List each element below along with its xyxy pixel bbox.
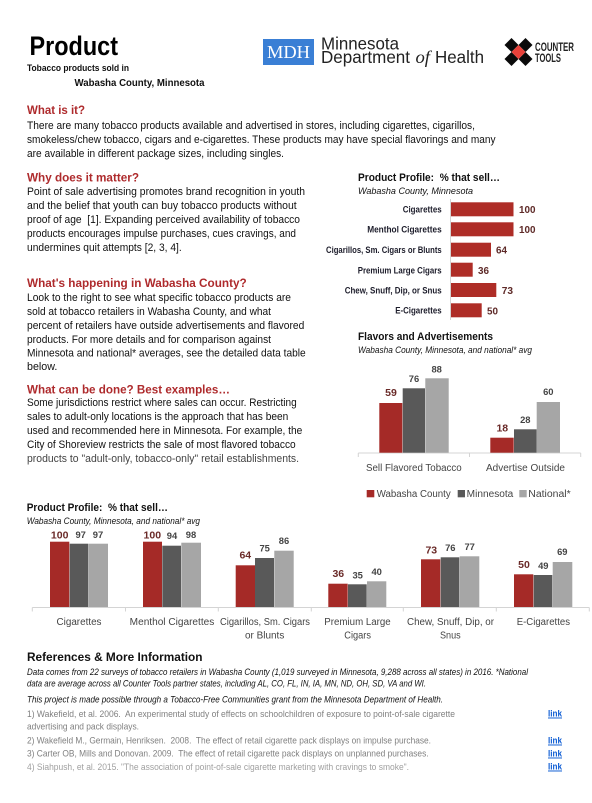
- body text: products to "adult-only, tobacco-only" retail establishments.: [27, 453, 299, 465]
- bar: Menthol Cigarettes: Menthol Cigarettes: [367, 224, 442, 236]
- group: Sell Flavored Tobacco: 76: [409, 373, 419, 384]
- legend: Minnesota: [467, 489, 514, 500]
- body text: Minnesota and national* averages, see the detailed data table: [27, 348, 306, 360]
- group: Advertise Outside: [486, 386, 565, 474]
- group: Premium Large Cigars: Premium Large: [324, 617, 391, 628]
- reference 4: link: [548, 762, 563, 772]
- body text: products. For more details and for comparison against: [27, 334, 271, 346]
- group: Premium Large Cigars: Cigars: [344, 630, 371, 642]
- reference 2: 2) Wakefield M., Germain, Henriksen. 2008. The effect of retail cigarette pack displays on impulse purchase.: [27, 734, 431, 746]
- logo: Counter Tools: COUNTER: [535, 42, 574, 54]
- bar: Cigarettes: [403, 202, 536, 216]
- legend: [367, 489, 571, 500]
- title: Product: [30, 31, 118, 61]
- group: Sell Flavored Tobacco: 59: [385, 387, 397, 399]
- chart subtitle: Wabasha County, Minnesota, and national* avg: [358, 344, 533, 355]
- group: Cigarillos: Cigarillos, Sm. Cigars: [220, 617, 310, 628]
- group: Cigarettes: [50, 529, 108, 628]
- logo: Counter Tools: [504, 38, 574, 66]
- reference 1: advertising and pack displays.: [27, 720, 139, 732]
- body text: Point of sale advertising promotes brand recognition in youth: [27, 186, 305, 198]
- bar: Chew, Snuff: 73: [502, 285, 513, 297]
- group: Cigarillos: or Blunts: [245, 630, 284, 642]
- chart heading: Product Profile: % that sell…: [358, 172, 500, 184]
- group: Cigarettes: 97: [75, 529, 86, 540]
- group: E-Cigarettes: E-Cigarettes: [517, 617, 570, 628]
- group: Cigarettes: 100: [51, 530, 69, 542]
- logo: Minnesota Department of Health: Health: [435, 47, 484, 67]
- group: Chew, Snuff: 76: [445, 542, 456, 553]
- logo: Minnesota Department of Health: Minnesota: [321, 34, 399, 54]
- group: Chew, Snuff: 77: [464, 541, 475, 552]
- group: Menthol Cigarettes: 100: [144, 530, 161, 542]
- reference 1: link: [548, 708, 563, 720]
- heading: What is it?: [27, 103, 85, 117]
- group: Cigarillos: [220, 535, 310, 642]
- body text: Look to the right to see what specific tobacco products are: [27, 292, 291, 304]
- header: [27, 31, 574, 89]
- body text: [27, 186, 305, 254]
- group: E-Cigarettes: 50: [518, 559, 530, 571]
- bar: Cigarillos: Cigarillos, Sm. Cigars or Blunts: [326, 245, 442, 256]
- group: E-Cigarettes: [514, 546, 572, 628]
- logo: Minnesota Department of Health: [263, 34, 484, 67]
- body text: below.: [27, 361, 57, 373]
- reference 3: link: [548, 748, 563, 760]
- group: Menthol Cigarettes: 98: [186, 529, 196, 540]
- chart: product profile comparison columns: [27, 502, 589, 642]
- bar: Cigarillos: [326, 243, 507, 257]
- group: Premium Large Cigars: 36: [332, 568, 344, 580]
- body text: sales to adult-only locations is the approach that has been: [27, 411, 288, 423]
- body text: Some jurisdictions restrict where sales can occur. Restricting: [27, 397, 297, 409]
- body text: [27, 120, 496, 160]
- group: Sell Flavored Tobacco: Sell Flavored Tobacco: [366, 463, 462, 474]
- reference 4: 4) Siahpush, et al. 2015. "The association of point-of-sale cigarette marketing with cravings to smoke".: [27, 761, 409, 772]
- group: Cigarettes: Cigarettes: [56, 617, 102, 628]
- section: what is it: [27, 103, 496, 160]
- group: E-Cigarettes: 69: [557, 546, 568, 557]
- group: Cigarillos: 86: [279, 535, 289, 546]
- bar: E-Cigarettes: 50: [487, 306, 498, 318]
- logo: Minnesota Department of Health: MDH: [267, 42, 310, 62]
- bar: Cigarettes: 100: [519, 204, 536, 216]
- heading: References & More Information: [27, 650, 202, 664]
- body text: products encourages impulse purchases, cues cravings, and: [27, 228, 296, 240]
- group: Advertise Outside: 28: [520, 414, 531, 425]
- body text: proof of age [1]. Expanding perceived availability of tobacco: [27, 214, 300, 226]
- bar: Cigarettes: Cigarettes: [403, 204, 442, 216]
- heading: What's happening in Wabasha County?: [27, 276, 247, 290]
- data note: data are average across all Counter Tools partner states, including AL, CO, FL, IN, IA, MN, ND, OH, SD, VA and WI.: [27, 678, 426, 688]
- chart heading: Flavors and Advertisements: [358, 331, 493, 343]
- group: Sell Flavored Tobacco: 88: [431, 364, 442, 374]
- bar: Premium Large Cigars: Premium Large Cigars: [358, 266, 442, 276]
- group: Advertise Outside: 60: [543, 386, 554, 397]
- body text: undermines quit attempts [2, 3, 4].: [27, 242, 182, 254]
- group: Cigarillos: 64: [239, 550, 251, 562]
- reference 3: 3) Carter OB, Mills and Donovan. 2009. The effect of retail cigarette pack displays on unplanned purchases.: [27, 748, 429, 758]
- group: Advertise Outside: 18: [496, 422, 508, 434]
- legend: Wabasha County: [377, 489, 451, 500]
- group: Sell Flavored Tobacco: [366, 364, 462, 474]
- bar: Chew, Snuff: Chew, Snuff, Dip, or Snus: [345, 286, 442, 296]
- reference 1: 1) Wakefield, et al. 2006. An experimental study of effects on schoolchildren of exposure to point-of-sale cigarette: [27, 708, 455, 719]
- bar: E-Cigarettes: E-Cigarettes: [395, 306, 442, 316]
- group: Chew, Snuff: 73: [425, 544, 437, 556]
- group: Premium Large Cigars: 35: [352, 570, 363, 580]
- group: Menthol Cigarettes: Menthol Cigarettes: [130, 617, 214, 628]
- body text: are available in different package sizes, including singles.: [27, 148, 284, 160]
- group: Menthol Cigarettes: [130, 529, 214, 628]
- body text: City of Shoreview restricts the sale of most flavored tobacco: [27, 439, 296, 451]
- body text: [27, 292, 306, 373]
- logo: Minnesota Department of Health: of: [416, 47, 432, 67]
- group: Cigarettes: 97: [93, 529, 103, 540]
- heading: Why does it matter?: [27, 170, 139, 184]
- logo: Minnesota Department of Health: Department: [321, 47, 410, 67]
- subtitle line 1: Tobacco products sold in: [27, 63, 129, 73]
- bar: Cigarillos: 64: [496, 244, 507, 256]
- group: Premium Large Cigars: 40: [371, 566, 382, 577]
- reference 1: [27, 708, 563, 732]
- section: why does it matter: [27, 170, 305, 254]
- data note: [27, 666, 529, 688]
- body text: and the belief that youth can buy tobacco products without: [27, 200, 297, 212]
- group: Premium Large Cigars: [324, 566, 391, 642]
- chart heading: Product Profile: % that sell…: [27, 502, 168, 514]
- heading: What can be done? Best examples…: [27, 382, 230, 396]
- group: E-Cigarettes: 49: [538, 560, 549, 571]
- bar: Menthol Cigarettes: [367, 222, 536, 236]
- bar: Premium Large Cigars: 36: [478, 265, 489, 277]
- chart subtitle: Wabasha County, Minnesota: [358, 185, 473, 196]
- bar: E-Cigarettes: [395, 303, 498, 318]
- bar: Menthol Cigarettes: 100: [519, 224, 536, 236]
- bar: Chew, Snuff: [345, 283, 513, 297]
- group: Advertise Outside: Advertise Outside: [486, 463, 565, 474]
- legend: National*: [528, 489, 571, 500]
- chart: flavors and advertisements: [358, 331, 581, 500]
- section: references: [27, 650, 563, 772]
- body text: used and recommended here in Minnesota. For example, the: [27, 425, 302, 437]
- group: Cigarillos: 75: [259, 542, 270, 554]
- reference 2: link: [548, 736, 563, 746]
- subtitle county: Wabasha County, Minnesota: [74, 78, 205, 89]
- body text: sold at tobacco retailers in Wabasha County, and what: [27, 306, 271, 318]
- body text: percent of retailers have outside advertisements and flavored: [27, 320, 304, 332]
- funding note: This project is made possible through a Tobacco-Free Communities grant from the Minnesota Department of Health.: [27, 694, 443, 704]
- body text: There are many tobacco products available and advertised in stores, including cigarettes, cigarillos,: [27, 120, 475, 132]
- chart subtitle: Wabasha County, Minnesota, and national* avg: [27, 515, 201, 526]
- section: what can be done: [27, 382, 302, 465]
- group: Chew, Snuff: [407, 541, 495, 642]
- bar: Premium Large Cigars: [358, 263, 489, 277]
- group: Menthol Cigarettes: 94: [167, 530, 178, 541]
- chart: product profile county horizontal bars: [326, 172, 536, 320]
- body text: [27, 397, 302, 465]
- group: Chew, Snuff: Chew, Snuff, Dip, or: [407, 617, 495, 628]
- body text: smokeless/chew tobacco, cigars and e-cigarettes. These products may have special flavorings and many: [27, 134, 496, 146]
- logo: Counter Tools: TOOLS: [535, 53, 561, 65]
- group: Chew, Snuff: Snus: [440, 630, 461, 642]
- section: what's happening: [27, 276, 306, 373]
